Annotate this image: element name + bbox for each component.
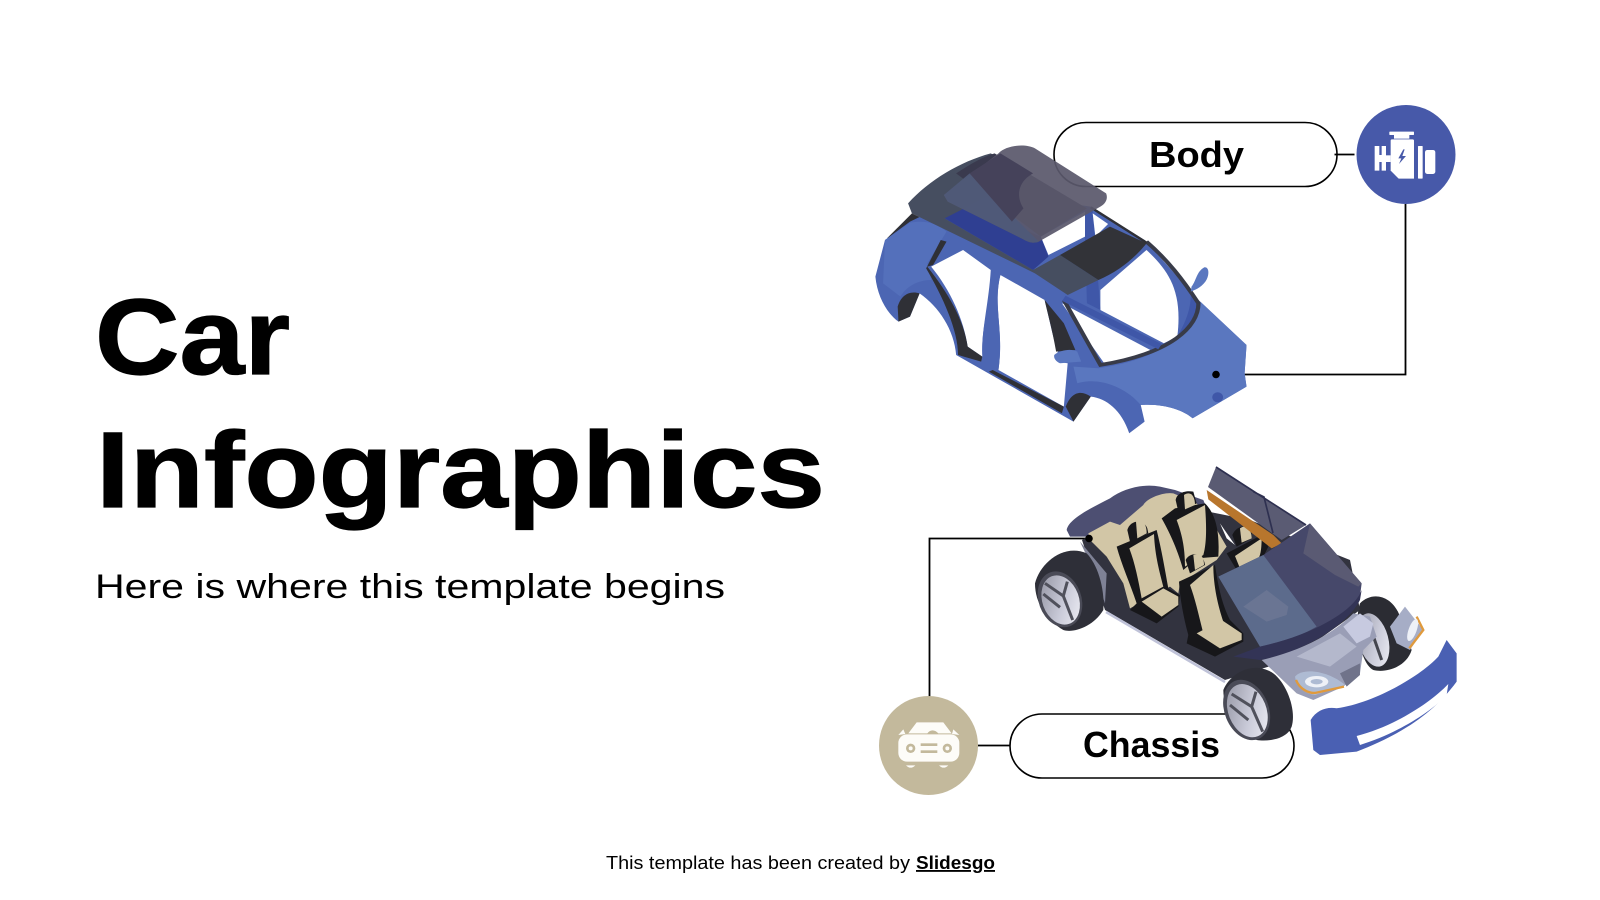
- seat seen through glass: [1243, 590, 1288, 622]
- roof blue recess: [945, 203, 1048, 270]
- front left headlight: [1295, 671, 1345, 695]
- footer credit: Slidesgo: [916, 852, 995, 873]
- rear beige shelf: [1088, 493, 1227, 608]
- hood: [1073, 302, 1247, 418]
- door mirror: [1054, 350, 1081, 363]
- floor: [1082, 500, 1360, 680]
- connector: chassis: [930, 538, 1090, 746]
- front wheel: [1215, 668, 1293, 747]
- windows and front: [1207, 467, 1457, 755]
- a pillar far side: [1085, 210, 1100, 310]
- rear dark inner: [887, 213, 933, 238]
- windshield back panel: [1303, 523, 1362, 587]
- windshield opening: [1100, 250, 1179, 343]
- title: [95, 276, 825, 530]
- roof side band: [908, 153, 1098, 295]
- subtitle: Here is where this template begins: [95, 568, 725, 606]
- title: Infographics: [96, 409, 825, 530]
- cross bar: [1064, 298, 1160, 347]
- chassis label pill: Chassis: [1083, 724, 1220, 765]
- lower windshield opening: [1062, 303, 1150, 363]
- engine highlights: [1343, 613, 1373, 643]
- icon circle: engine: [1356, 105, 1456, 204]
- under-car parts: [1352, 596, 1412, 671]
- pillar: [982, 272, 1000, 370]
- roof right opening: [1093, 213, 1108, 237]
- rear shell: [1067, 486, 1210, 537]
- windshield main: [1218, 523, 1362, 647]
- footer credit: This template has been created by: [606, 852, 911, 873]
- seat back-right: [1162, 491, 1219, 570]
- body shell: [875, 190, 1247, 433]
- roof rail: [1091, 207, 1147, 243]
- door opening front: [998, 275, 1068, 407]
- rear hub: [1080, 542, 1107, 603]
- sun roof back panel: [956, 153, 1087, 237]
- icon: engine: [1375, 132, 1435, 179]
- bumper: [1311, 640, 1457, 755]
- roof dark panel: [1060, 227, 1147, 280]
- wheel arch shadow front: [1066, 393, 1091, 422]
- roof top opening: [1041, 212, 1085, 255]
- icon: car front: [898, 722, 959, 768]
- illustration: car body: [875, 146, 1247, 433]
- fog lamp: [1212, 392, 1223, 402]
- door frame shadows: [926, 240, 1075, 413]
- orange trim: [1207, 490, 1282, 548]
- floor edge: [1106, 612, 1225, 682]
- interior: [1030, 486, 1268, 657]
- windshield dash: [1233, 590, 1362, 660]
- connector: body: [1216, 154, 1406, 374]
- body label pill: Body: [1149, 134, 1244, 175]
- seat front: [1179, 554, 1243, 657]
- rear wheel: [1030, 551, 1104, 634]
- windshield light glass: [1218, 555, 1317, 647]
- right headlight: [1390, 607, 1423, 650]
- grille: [1340, 663, 1360, 687]
- wheel arch shadow rear: [898, 292, 920, 322]
- sun roof slate section: [944, 173, 1039, 243]
- sun roof dark section: [970, 153, 1033, 222]
- door opening rear: [931, 250, 991, 357]
- illustration: car chassis: [1030, 467, 1457, 755]
- title: Car: [95, 276, 290, 397]
- windshield frame: [1064, 242, 1198, 365]
- rear quarter highlight: [883, 222, 947, 297]
- engine bay: [1262, 613, 1377, 700]
- seat rear left: [1117, 521, 1180, 623]
- seat far right: [1220, 523, 1268, 570]
- upper window: [1208, 467, 1306, 540]
- windshield inner panel: [1164, 295, 1200, 347]
- chassis label pill: [1010, 714, 1294, 778]
- icon circle: car: [879, 696, 978, 795]
- sun roof glass: [944, 146, 1107, 243]
- connector dot: body: [1212, 371, 1220, 378]
- far wheel: [1357, 596, 1412, 671]
- body label pill: [1054, 122, 1337, 186]
- connector dot: chassis: [1085, 535, 1093, 542]
- mirror: [1191, 267, 1208, 292]
